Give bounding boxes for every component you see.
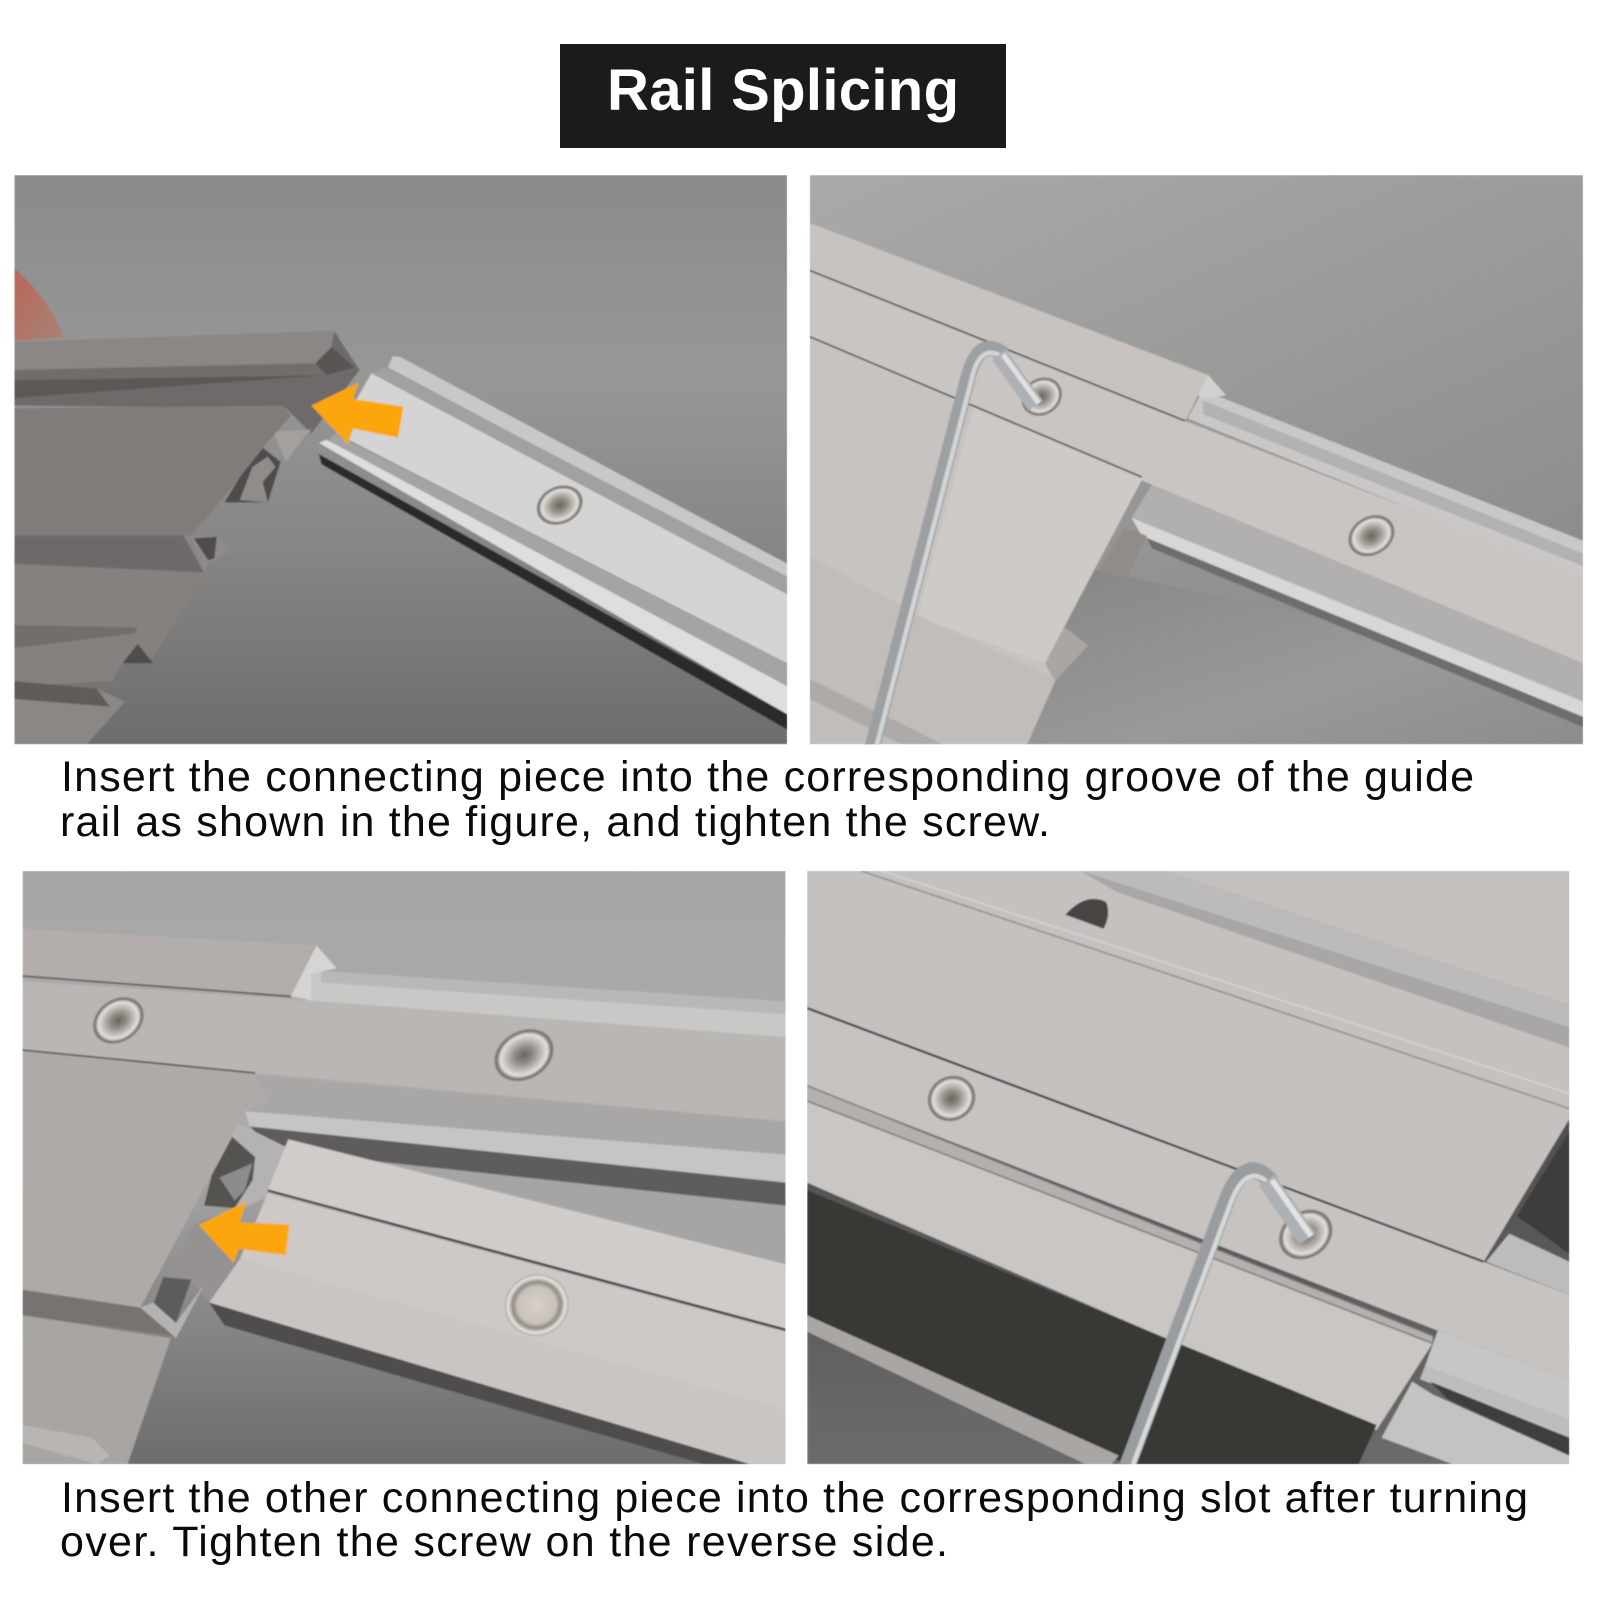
caption: step 1: rail as shown in the figure, and tighten the screw. bbox=[60, 798, 1050, 846]
caption: step 2 bbox=[60, 1474, 1528, 1566]
caption: step 2: over. Tighten the screw on the reverse side. bbox=[60, 1518, 948, 1566]
caption: step 1 bbox=[60, 753, 1474, 846]
panel: step 2 photo, second connector before insertion bbox=[22, 871, 786, 1464]
title bbox=[560, 44, 1006, 148]
caption: step 2: Insert the other connecting piece into the corresponding slot after turning bbox=[61, 1474, 1528, 1522]
panel: step 1 photo, tightening screw with hex key bbox=[810, 175, 1583, 750]
caption: step 1: Insert the connecting piece into the corresponding groove of the guide bbox=[61, 753, 1474, 801]
icon: hex key bbox=[1127, 1170, 1311, 1468]
panel: step 2 photo, tightening reverse-side screw bbox=[807, 871, 1569, 1468]
panel: step 1 photo, rail and connector before insertion bbox=[14, 175, 787, 744]
title: Rail Splicing bbox=[607, 58, 959, 123]
icon: hex key bbox=[871, 348, 1039, 750]
